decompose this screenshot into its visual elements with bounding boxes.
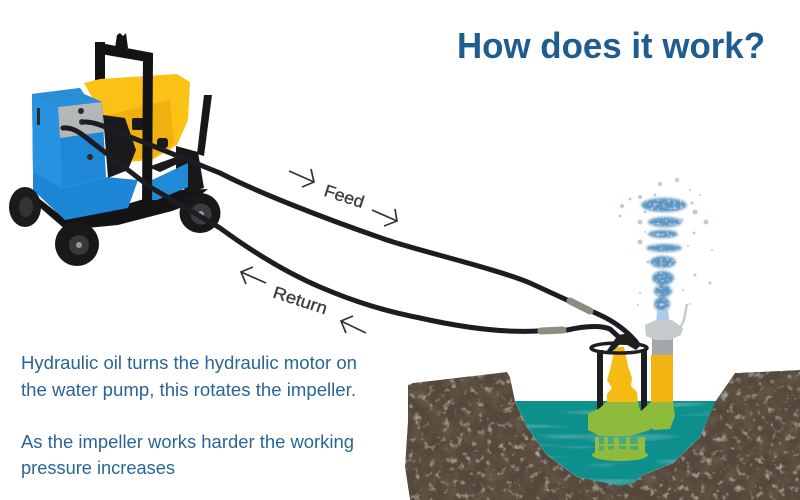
box left side — [32, 94, 63, 188]
silver control panel — [58, 102, 103, 138]
hose manifold — [606, 333, 641, 352]
submersible pump — [588, 304, 687, 461]
description text block: As the impeller works harder the working — [21, 432, 354, 452]
right wheel — [180, 193, 220, 233]
black engine block — [103, 115, 136, 178]
blue control box — [32, 88, 106, 188]
lifting frame top bar and upright — [95, 33, 153, 207]
rear lifting frame upright — [95, 42, 105, 87]
arrow: feed 2 — [372, 209, 397, 226]
spray droplets — [618, 178, 713, 306]
label: return: Return — [271, 283, 330, 318]
submerged strainer — [592, 437, 648, 461]
arrow: return 1 — [241, 267, 266, 284]
arrow: feed 1 — [289, 169, 314, 187]
cage legs — [597, 350, 647, 418]
hydraulic power unit on cart — [9, 33, 220, 266]
rear chassis rails — [36, 189, 208, 230]
submerged pump body — [588, 402, 675, 436]
jet column — [641, 198, 687, 311]
box top — [32, 88, 102, 107]
description text block: the water pump, this rotates the impeller. — [21, 380, 356, 400]
cart outrigger — [176, 146, 204, 193]
feed hose — [85, 122, 637, 343]
blue base — [33, 172, 138, 220]
tank lower panel — [104, 100, 174, 160]
engine controls — [132, 118, 186, 172]
cage ring — [591, 343, 647, 353]
title: How does it work? — [457, 25, 765, 66]
front wheel — [55, 222, 99, 266]
panel gauges — [37, 108, 93, 160]
return hose — [63, 128, 622, 340]
description text block: pressure increases — [21, 458, 175, 478]
discharge coupling — [645, 320, 683, 340]
lifting arm — [197, 95, 212, 156]
coupling lever — [680, 304, 687, 327]
blue base right — [152, 163, 188, 200]
return arrows and label — [241, 267, 366, 333]
description text block: Hydraulic oil turns the hydraulic motor on — [21, 353, 357, 373]
water jet — [618, 178, 713, 325]
feed arrows and label — [289, 169, 397, 226]
hose couplings — [541, 301, 590, 331]
ground cross-section — [405, 370, 800, 500]
discharge pipe — [651, 355, 673, 402]
water pool — [515, 401, 716, 486]
label: feed: Feed — [322, 181, 367, 212]
rear left wheel — [9, 187, 41, 227]
yellow hydraulic motor — [607, 347, 638, 402]
jet nozzle water — [656, 310, 670, 325]
yellow oil tank — [84, 74, 190, 162]
pipe collar — [652, 338, 673, 355]
description text block — [21, 353, 357, 478]
arrow: return 2 — [341, 316, 366, 333]
